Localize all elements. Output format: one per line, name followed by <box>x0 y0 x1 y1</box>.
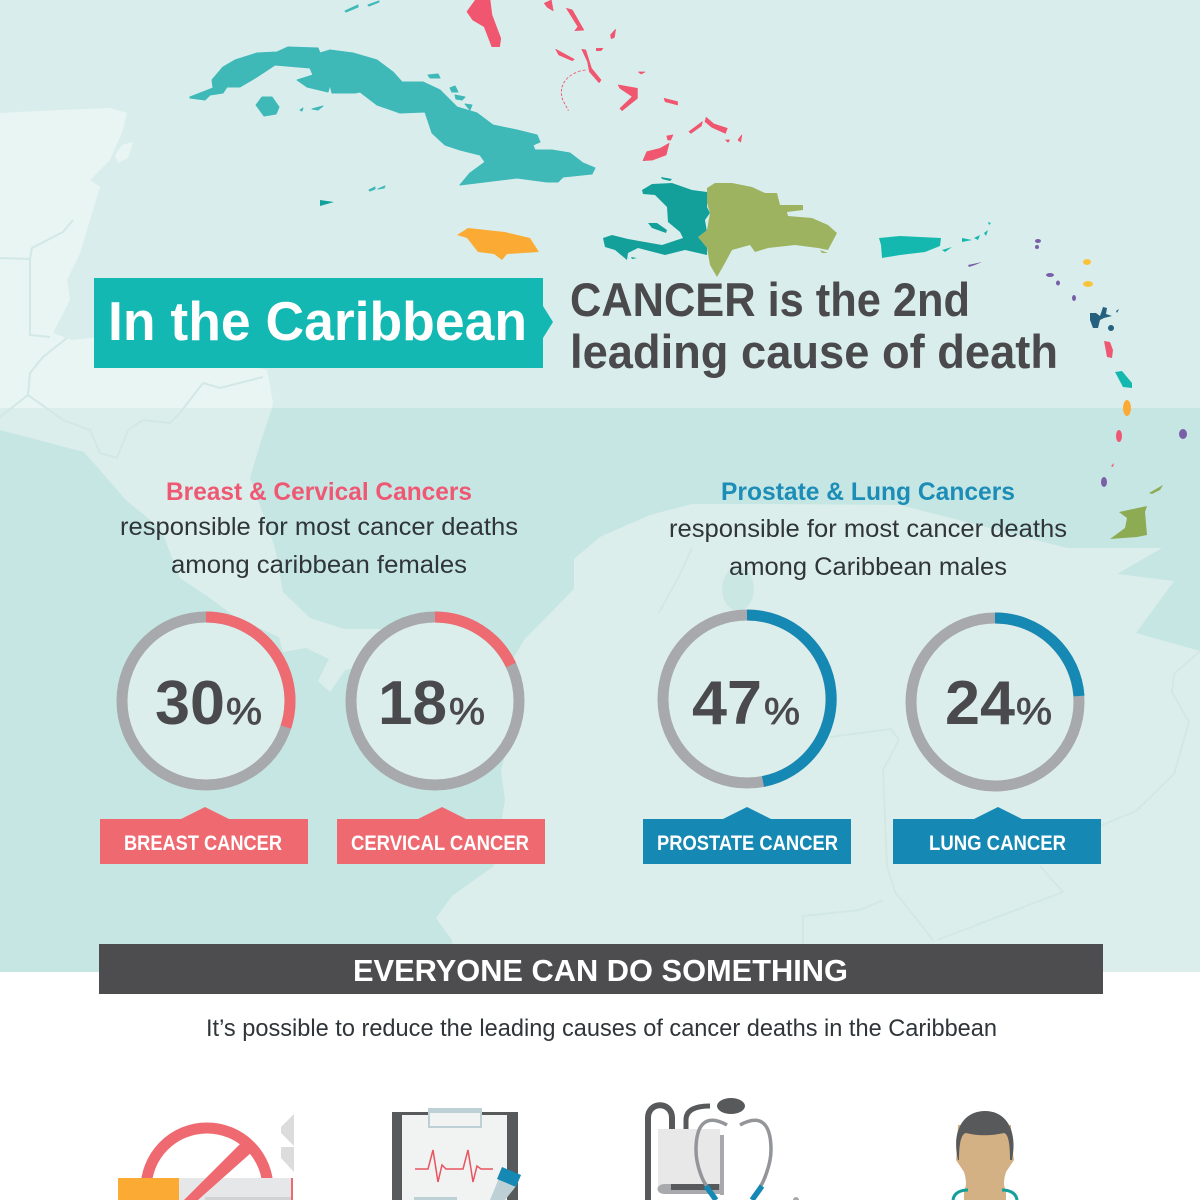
background land: Central America, lower band <box>0 408 1200 972</box>
label: lung cancer: LUNG CANCER <box>929 832 1066 855</box>
icon: no smoking <box>118 1114 294 1200</box>
donut: cervical cancer 18%: 18 <box>378 669 447 738</box>
label: cervical cancer <box>337 807 545 864</box>
donut: prostate cancer 47%: 47 <box>692 669 762 738</box>
donut: breast cancer 30%: 30 <box>155 669 225 738</box>
donut: breast cancer 30% <box>122 617 290 785</box>
label: breast cancer <box>100 807 308 864</box>
background borders <box>0 220 1200 944</box>
icon: doctor <box>953 1111 1017 1200</box>
map: Puerto Rico and Virgin Islands <box>879 222 991 258</box>
section banner <box>99 944 1103 994</box>
background sea detail: Lake Maracaibo <box>722 567 754 611</box>
map: Cuba <box>190 1 595 206</box>
title banner: In the Caribbean <box>108 290 527 352</box>
map: Jamaica <box>457 228 539 260</box>
map: Bahamas and Turks and Caicos <box>467 0 742 161</box>
headline: leading cause of death <box>570 325 1058 378</box>
donut: lung cancer 24%: 24 <box>945 669 1016 738</box>
female cancers heading: Breast & Cervical Cancers <box>166 478 472 506</box>
icon: stethoscope and blood pressure cuff <box>648 1098 799 1200</box>
icon: clipboard with ECG <box>392 1108 521 1200</box>
male cancers heading: among Caribbean males <box>729 553 1007 581</box>
male cancers heading: Prostate & Lung Cancers <box>721 478 1015 506</box>
label: lung cancer <box>893 807 1101 864</box>
headline <box>570 273 1058 378</box>
donut: cervical cancer 18% <box>351 617 519 785</box>
background land detail: Cozumel <box>115 142 133 163</box>
map: Dominican Republic <box>698 183 837 277</box>
label: breast cancer: BREAST CANCER <box>124 832 282 855</box>
map: Haiti <box>603 177 710 260</box>
map: Lesser Antilles <box>968 239 1187 539</box>
donut: prostate cancer 47%: % <box>764 691 800 733</box>
label: cervical cancer: CERVICAL CANCER <box>351 832 529 855</box>
label: prostate cancer <box>643 807 851 864</box>
donut: cervical cancer 18%: % <box>449 691 485 733</box>
donut: lung cancer 24%: % <box>1016 691 1052 733</box>
donut: lung cancer 24% <box>911 618 1079 786</box>
female cancers heading: responsible for most cancer deaths <box>120 513 518 541</box>
headline: CANCER is the 2nd <box>570 273 970 326</box>
donut: prostate cancer 47% <box>663 615 831 783</box>
section subtitle: It’s possible to reduce the leading causes of cancer deaths in the Caribbean <box>206 1015 997 1042</box>
background land: Yucatan and Central America, upper band <box>0 108 273 408</box>
male cancers heading <box>669 478 1067 581</box>
female cancers heading <box>120 478 518 579</box>
label: prostate cancer: PROSTATE CANCER <box>657 832 838 855</box>
female cancers heading: among caribbean females <box>171 551 467 579</box>
section banner: EVERYONE CAN DO SOMETHING <box>353 953 848 988</box>
title banner <box>94 278 553 368</box>
male cancers heading: responsible for most cancer deaths <box>669 515 1067 543</box>
donut: breast cancer 30%: % <box>226 691 262 733</box>
